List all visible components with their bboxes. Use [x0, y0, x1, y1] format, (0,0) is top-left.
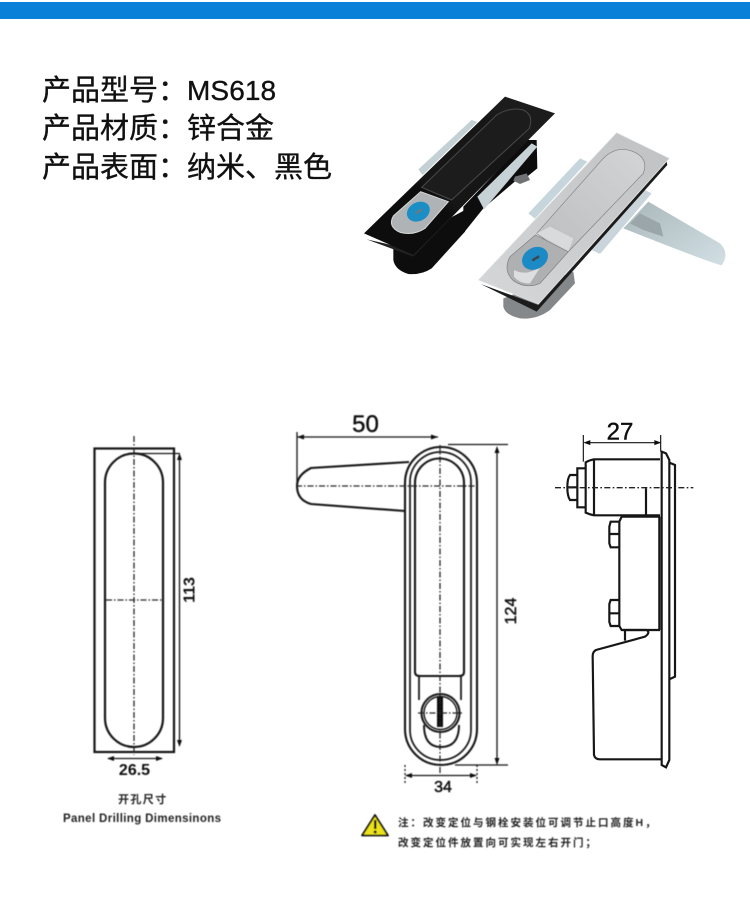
note line 1: 注：改变定位与钢栓安装位可调节止口高度H，: [398, 816, 658, 829]
note text: [398, 816, 658, 849]
model line: MS618: [187, 75, 276, 106]
top blue banner: [0, 2, 750, 19]
dimension 124: 124: [503, 598, 520, 624]
handle outline: [415, 458, 464, 676]
chinese caption: 开孔尺寸: [118, 792, 168, 806]
outer panel outline: [94, 448, 174, 752]
surface line: 产品表面：: [42, 152, 187, 184]
width dimension 26.5: [107, 756, 163, 779]
model line: 产品型号：: [42, 75, 187, 107]
lower housing: [593, 630, 662, 759]
lock cylinder and nut: [567, 459, 660, 515]
dimension 34: [405, 765, 477, 796]
drawing: side view: [555, 418, 693, 767]
english caption: Panel Drilling Dimensinons: [63, 813, 221, 825]
central block with bolts: [609, 517, 660, 630]
material line: 锌合金: [187, 112, 274, 145]
dimension 50: 50: [352, 411, 379, 438]
cutout pill shape: [105, 454, 163, 747]
icon: warning triangle: [362, 815, 388, 836]
height dimension 113: [134, 453, 198, 747]
width dimension 26.5: 26.5: [119, 762, 150, 779]
dimension 34: 34: [434, 779, 452, 796]
product specification text: [42, 74, 332, 184]
note line 2: 改变定位件放置向可实现左右开门；: [398, 836, 598, 849]
surface line: 纳米、黑色: [187, 151, 332, 184]
drawing: front view with lever: [296, 411, 520, 796]
material line: 产品材质：: [42, 113, 187, 145]
dimension 27: 27: [607, 418, 633, 445]
middle body outline: [410, 452, 471, 760]
mounting plate: [662, 452, 675, 767]
silver latch: [478, 133, 725, 319]
dimension 27: [583, 418, 661, 462]
product photo: black and silver latches: [364, 97, 725, 319]
black latch: [364, 97, 555, 274]
drawing: panel drilling dimensions: [63, 436, 221, 825]
warning note: [362, 815, 658, 849]
lever arm: [297, 462, 409, 511]
dimension 124: [448, 444, 520, 765]
dimension 50: [297, 411, 438, 486]
centre line: [555, 486, 693, 490]
centre lines: [106, 436, 163, 755]
centre lines: [296, 445, 480, 775]
outer body outline: [405, 447, 477, 765]
lock recess: [419, 676, 461, 747]
height dimension 113: 113: [182, 577, 198, 603]
